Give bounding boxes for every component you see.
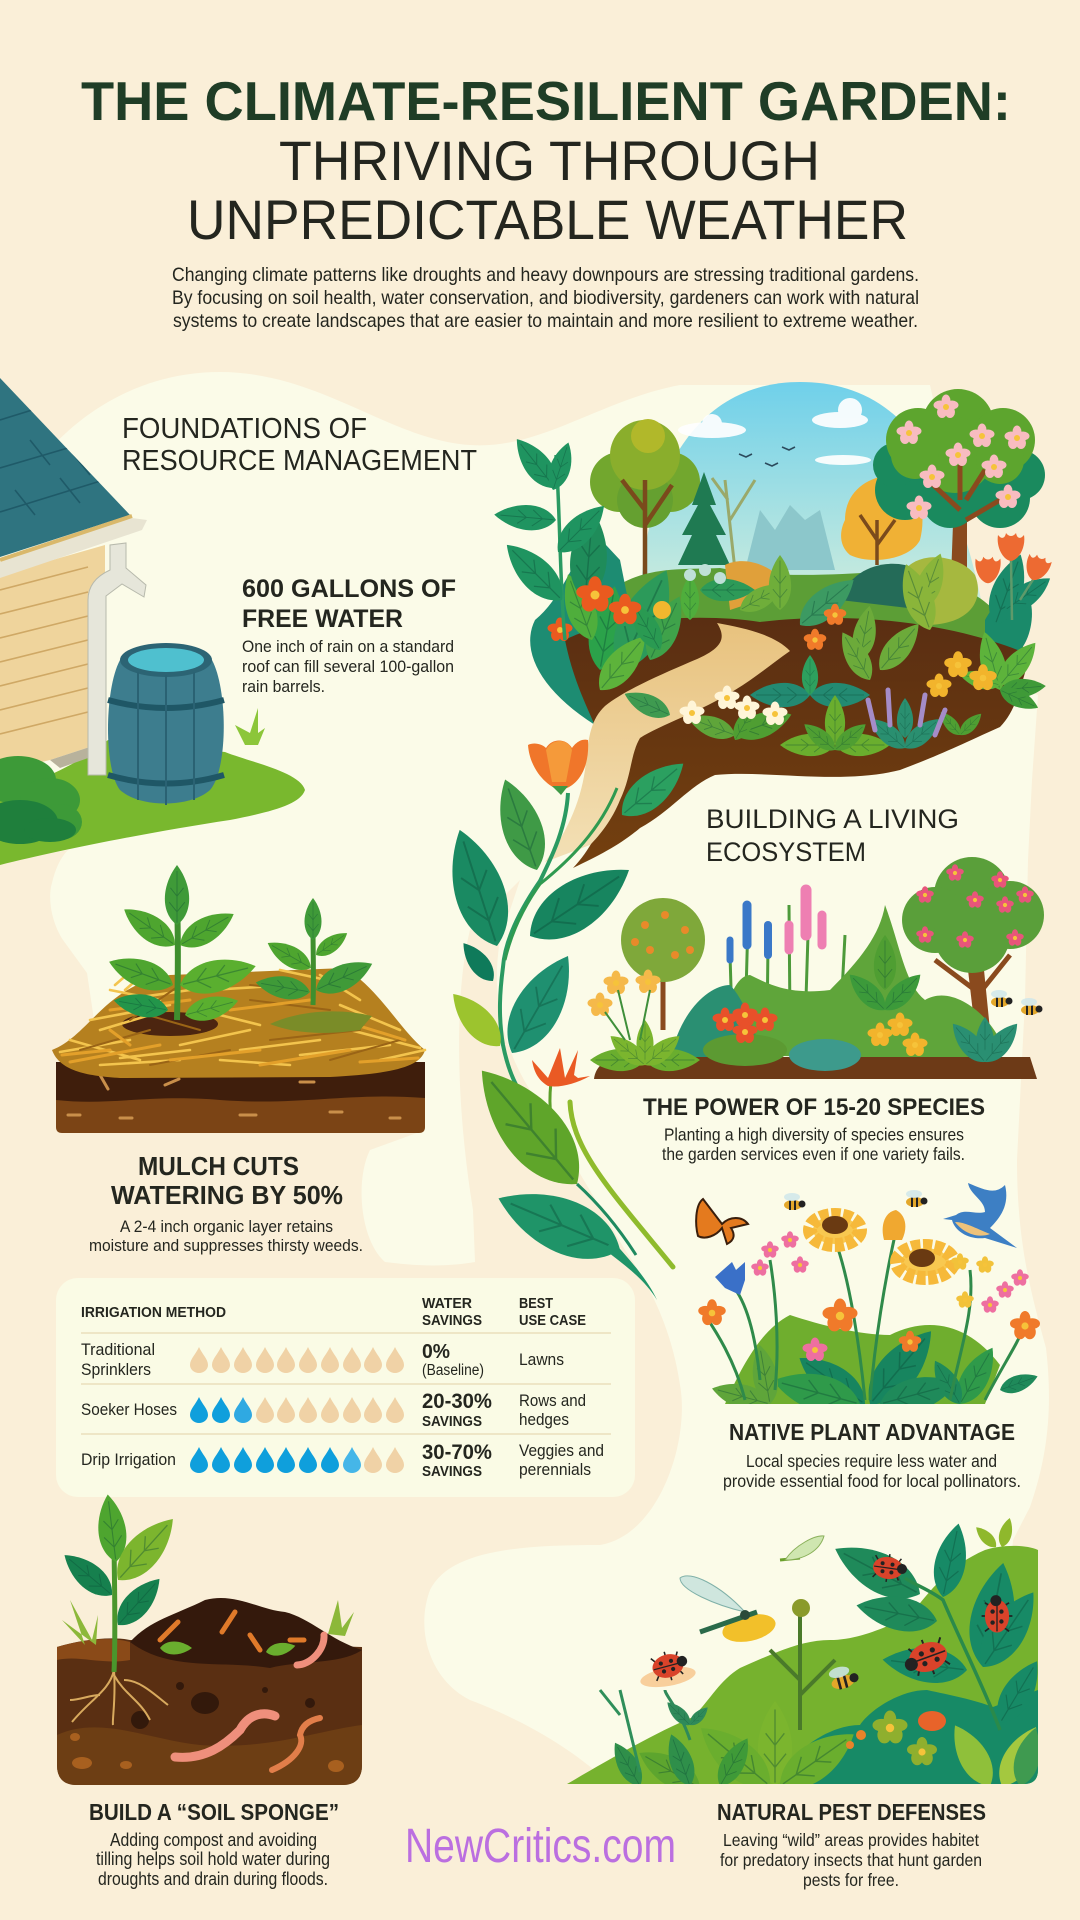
text: build a soil sponge: BUILD A “SOIL SPONGE” xyxy=(89,1799,339,1825)
heading: foundations of resource management xyxy=(122,413,477,477)
gutter xyxy=(0,518,147,578)
straw xyxy=(52,968,425,1078)
illustration: left sprig xyxy=(493,431,613,640)
blue flower xyxy=(715,1262,745,1295)
text: power of species xyxy=(643,1094,985,1164)
small yellow flowers xyxy=(588,970,660,1016)
heading: foundations of resource management: RESOURCE MANAGEMENT xyxy=(122,445,477,477)
teal undergrowth xyxy=(780,1690,1038,1784)
row: drip irrigation: SAVINGS xyxy=(422,1464,482,1480)
row: drip irrigation: Veggies and xyxy=(519,1441,604,1460)
lupins and spikes xyxy=(730,905,845,1030)
garden path xyxy=(545,623,790,862)
sky xyxy=(640,382,985,620)
text: mulch cuts watering: moisture and suppresses thirsty weeds. xyxy=(89,1236,363,1255)
text: 600 gallons of free water: roof can fill several 100-gallon xyxy=(242,657,454,676)
tree: bare xyxy=(712,478,755,570)
dragonfly xyxy=(680,1576,757,1632)
text: build a soil sponge xyxy=(89,1799,339,1889)
table header xyxy=(81,1296,586,1329)
row: soeker hoses: Soeker Hoses xyxy=(81,1400,177,1419)
bees and small insects xyxy=(784,1193,806,1210)
row: traditional sprinklers: Traditional xyxy=(81,1340,155,1359)
illustration: garden landscape xyxy=(530,382,1056,868)
row: traditional sprinklers: Sprinklers xyxy=(81,1360,151,1379)
butterfly xyxy=(696,1199,748,1244)
worms xyxy=(175,1714,275,1757)
row: soeker hoses: Rows and xyxy=(519,1391,586,1410)
text: power of species: THE POWER OF 15-20 SPECIES xyxy=(643,1094,985,1121)
text: natural pest defenses: pests for free. xyxy=(803,1870,899,1890)
ground xyxy=(594,1057,1037,1079)
heading: building a living ecosystem xyxy=(706,804,959,867)
title: UNPREDICTABLE WEATHER xyxy=(187,188,908,251)
text: 600 gallons of free water: One inch of rain on a standard xyxy=(242,637,454,656)
illustration: soil sponge xyxy=(56,1493,362,1785)
text: mulch cuts watering xyxy=(89,1151,363,1255)
tree: pine xyxy=(678,472,730,565)
text: natural pest defenses: Leaving “wild” areas provides habitet xyxy=(723,1830,979,1850)
row: traditional sprinklers xyxy=(81,1340,564,1379)
illustration: native plants xyxy=(696,1183,1040,1422)
text: native plant advantage: NATIVE PLANT ADVANTAGE xyxy=(729,1419,1015,1445)
pebbles xyxy=(70,1733,344,1772)
round orange tree xyxy=(660,950,666,1030)
text: native plant advantage xyxy=(723,1419,1021,1491)
birds xyxy=(739,447,795,466)
illustration: mulch bed xyxy=(52,865,425,1133)
leaves xyxy=(487,773,555,876)
compost mound xyxy=(130,1598,362,1668)
seedling plant 1 xyxy=(174,900,181,1020)
text: natural pest defenses xyxy=(717,1799,986,1890)
title: THE CLIMATE-RESILIENT GARDEN: xyxy=(81,70,1011,132)
seedling plant 2 xyxy=(310,930,316,1005)
roots xyxy=(70,1670,168,1725)
foliage right xyxy=(981,549,1035,630)
foliage xyxy=(712,1315,1038,1404)
text: 600 gallons of free water: FREE WATER xyxy=(242,605,403,633)
intro text: By focusing on soil health, water conservation, and biodiversity, gardeners can work with natural xyxy=(172,287,919,309)
orange blooms xyxy=(918,1711,946,1731)
stems with buds xyxy=(770,1615,835,1730)
clouds xyxy=(678,398,871,465)
intro text: Changing climate patterns like droughts and heavy downpours are stressing traditional gardens. xyxy=(172,264,919,286)
bee xyxy=(828,1663,860,1691)
soil block xyxy=(56,1062,425,1133)
row: drip irrigation: 30-70% xyxy=(422,1441,492,1464)
stems xyxy=(500,793,568,1096)
text: build a soil sponge: tilling helps soil hold water during xyxy=(96,1849,330,1869)
sunflowers xyxy=(813,1216,949,1276)
table header: SAVINGS xyxy=(422,1313,482,1329)
tree: orange xyxy=(841,475,922,560)
downpipe xyxy=(88,543,146,775)
text: natural pest defenses: for predatory insects that hunt garden xyxy=(720,1850,982,1870)
row: drip irrigation: perennials xyxy=(519,1460,591,1479)
text: mulch cuts watering: MULCH CUTS xyxy=(138,1151,299,1181)
text: build a soil sponge: Adding compost and avoiding xyxy=(110,1830,317,1850)
roof xyxy=(0,378,130,557)
text: 600 gallons of free water xyxy=(242,575,456,696)
yellow flower xyxy=(720,1610,778,1646)
text: build a soil sponge: droughts and drain during floods. xyxy=(98,1869,328,1889)
row: traditional sprinklers: (Baseline) xyxy=(422,1362,484,1379)
text: 600 gallons of free water: rain barrels. xyxy=(242,677,325,696)
title xyxy=(81,70,1011,251)
title: THRIVING THROUGH xyxy=(279,129,820,192)
bush xyxy=(0,756,82,844)
table header: USE CASE xyxy=(519,1313,586,1329)
row: soeker hoses: SAVINGS xyxy=(422,1414,482,1430)
low plants xyxy=(645,1049,700,1071)
orange tulip xyxy=(528,740,588,795)
text: power of species: Planting a high diversity of species ensures xyxy=(664,1124,964,1144)
text: natural pest defenses: NATURAL PEST DEFENSES xyxy=(717,1799,986,1825)
soil island xyxy=(565,618,1030,868)
grass xyxy=(62,1600,354,1645)
heading: building a living ecosystem: BUILDING A LIVING xyxy=(706,804,959,834)
tree: green xyxy=(590,419,700,590)
text: mulch cuts watering: WATERING BY 50% xyxy=(111,1180,343,1210)
foliage mass xyxy=(724,905,1000,1060)
text: native plant advantage: provide essential food for local pollinators. xyxy=(723,1471,1021,1491)
stems xyxy=(705,1235,1022,1400)
table header: BEST xyxy=(519,1296,553,1312)
soil cross-section xyxy=(57,1638,362,1785)
row: drip irrigation: Drip Irrigation xyxy=(81,1450,176,1469)
illustration: biodiversity bed xyxy=(588,857,1044,1079)
illustration: pest defense hillside xyxy=(567,1516,1050,1801)
watermark: NewCritics.com xyxy=(405,1820,676,1873)
foreground leaves xyxy=(614,1710,1038,1784)
foliage centre xyxy=(700,579,755,601)
row: soeker hoses: 20-30% xyxy=(422,1390,492,1413)
row: traditional sprinklers: 0% xyxy=(422,1341,450,1363)
pale flower xyxy=(639,1663,697,1691)
heading: foundations of resource management: FOUNDATIONS OF xyxy=(122,413,367,445)
text: native plant advantage: Local species require less water and xyxy=(746,1451,997,1471)
row: drip irrigation xyxy=(81,1441,604,1480)
lacewing xyxy=(780,1536,824,1560)
text: 600 gallons of free water: 600 GALLONS OF xyxy=(242,575,456,603)
foliage left xyxy=(583,583,632,673)
intro text: systems to create landscapes that are easier to maintain and more resilient to extreme weather. xyxy=(173,310,918,332)
illustration: central vine xyxy=(436,740,694,1300)
row: traditional sprinklers: Lawns xyxy=(519,1350,564,1369)
heading: building a living ecosystem: ECOSYSTEM xyxy=(706,837,866,867)
foliage lower xyxy=(810,683,870,707)
big leaves xyxy=(459,1051,600,1203)
panel: irrigation table xyxy=(56,1278,635,1497)
ladybugs xyxy=(871,1552,909,1585)
hedge row xyxy=(600,566,1028,680)
leaves with ladybugs xyxy=(826,1532,929,1611)
bluebird xyxy=(943,1183,1017,1248)
tree: pink blossom xyxy=(950,470,967,605)
red flower xyxy=(550,1075,556,1140)
grass lawn xyxy=(0,740,305,865)
bees xyxy=(991,990,1012,1007)
text: power of species: the garden services even if one variety fails. xyxy=(662,1144,965,1164)
intro text xyxy=(172,264,919,332)
illustration: house with rain barrel xyxy=(0,378,305,865)
table header: IRRIGATION METHOD xyxy=(81,1305,226,1321)
table header: WATER xyxy=(422,1296,473,1312)
teal bush left xyxy=(530,530,640,725)
house wall xyxy=(0,545,105,772)
green hillside xyxy=(567,1546,1038,1784)
plant stem and leaves xyxy=(112,1535,117,1672)
row: soeker hoses: hedges xyxy=(519,1410,569,1429)
large pink tree xyxy=(968,970,990,1030)
rain barrel xyxy=(108,660,224,804)
text: mulch cuts watering: A 2-4 inch organic layer retains xyxy=(120,1217,333,1236)
row: soeker hoses xyxy=(81,1390,586,1430)
grass tuft xyxy=(235,708,265,745)
distant hills xyxy=(745,505,835,570)
